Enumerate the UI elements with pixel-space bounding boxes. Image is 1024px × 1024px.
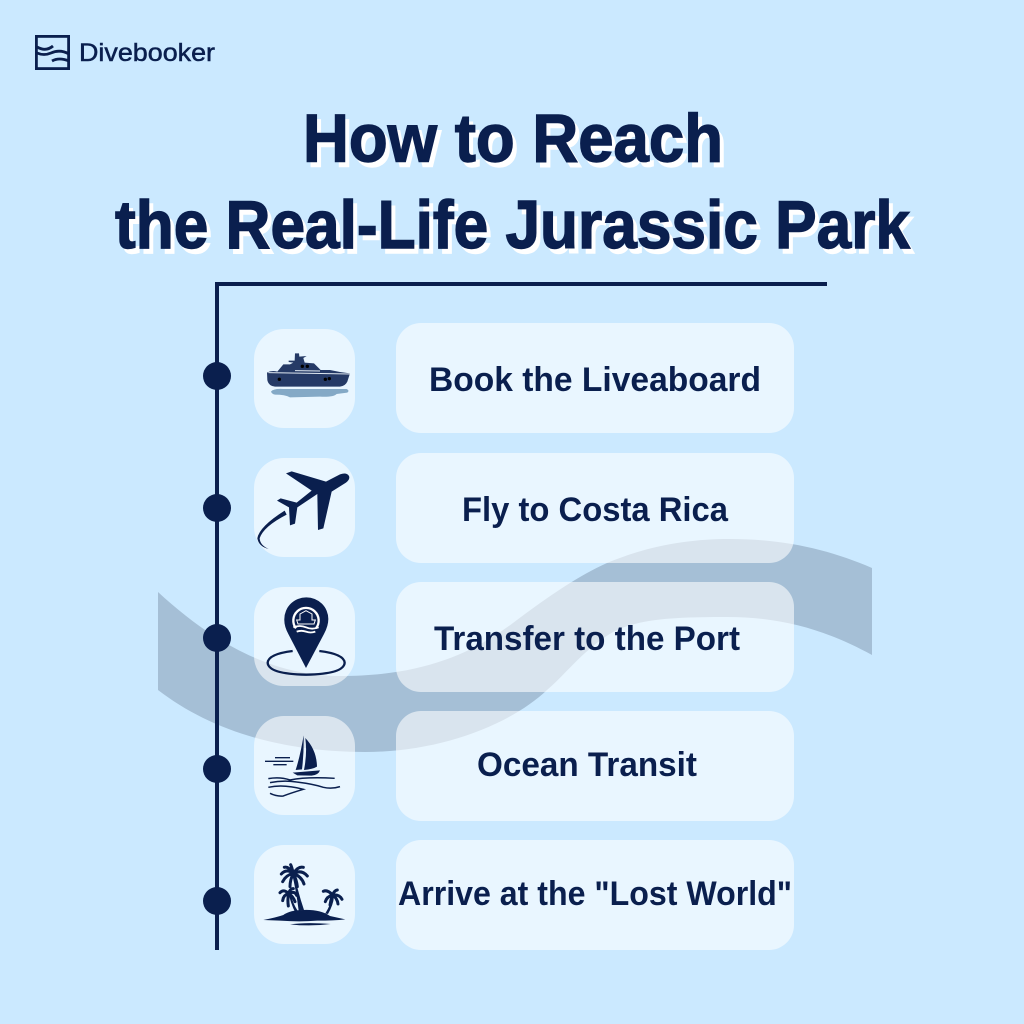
decorative wave band [158, 539, 872, 752]
timeline dot 2 [203, 494, 231, 522]
timeline dot 1 [203, 362, 231, 390]
icon: palm island [263, 865, 345, 925]
label 5: Arrive at the "Lost World" [398, 875, 792, 913]
icon: logo wave square [36, 36, 69, 69]
logo wordmark: Divebooker [79, 39, 215, 67]
icon card 3 [254, 587, 355, 686]
step 2: Fly to Costa Rica [203, 453, 794, 563]
icon card 1 [254, 329, 355, 428]
icon: sailboat [265, 735, 340, 796]
step 1: Book the Liveaboard [203, 323, 794, 433]
title: the Real-Life Jurassic Park [115, 187, 910, 263]
icon card 4 [254, 716, 355, 815]
step 4: Ocean Transit [203, 711, 794, 821]
icon: map pin with ship [268, 597, 345, 675]
card 5 [396, 840, 794, 950]
card 2 [396, 453, 794, 563]
step 3: Transfer to the Port [203, 582, 794, 692]
timeline dot 5 [203, 887, 231, 915]
icon: airplane [257, 471, 349, 549]
logo: Divebooker [36, 36, 215, 69]
timeline line [217, 284, 827, 950]
title [115, 100, 910, 263]
label 1: Book the Liveaboard [429, 361, 761, 399]
icon card 5 [254, 845, 355, 944]
title: How to Reach [303, 100, 723, 176]
timeline dot 4 [203, 755, 231, 783]
icon: yacht [267, 353, 350, 397]
label 4: Ocean Transit [477, 746, 697, 784]
label 3: Transfer to the Port [434, 620, 740, 658]
label 2: Fly to Costa Rica [462, 491, 729, 529]
card 1 [396, 323, 794, 433]
timeline dot 3 [203, 624, 231, 652]
card 3 [396, 582, 794, 692]
card 4 [396, 711, 794, 821]
step 5: Arrive at the "Lost World" [203, 840, 794, 950]
icon card 2 [254, 458, 355, 557]
